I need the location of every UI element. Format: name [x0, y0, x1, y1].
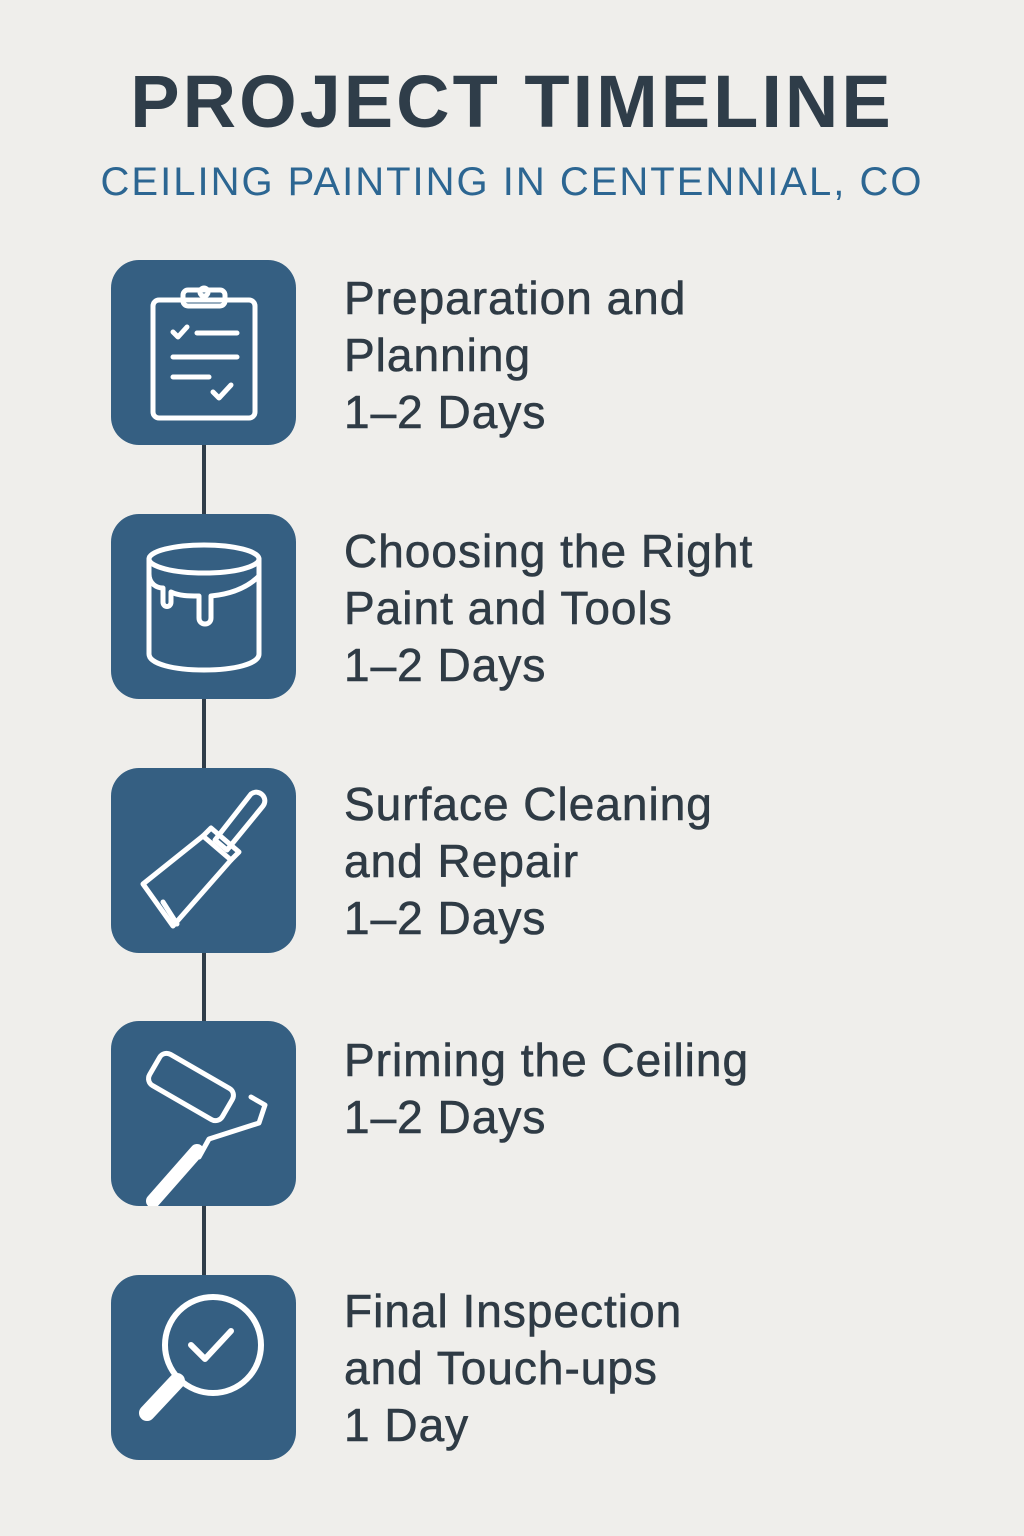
- title: PROJECT TIMELINE: [130, 60, 894, 143]
- step 2 text: Paint and Tools: [344, 582, 673, 634]
- step 1 text: Planning: [344, 329, 531, 381]
- step 3 text: 1–2 Days: [344, 892, 546, 944]
- step 2 text: [344, 525, 753, 691]
- step 3 text: and Repair: [344, 835, 579, 887]
- step 2 text: Choosing the Right: [344, 525, 753, 577]
- step 4 text: Priming the Ceiling: [344, 1034, 749, 1086]
- icon: paint can: [111, 514, 296, 699]
- subtitle: CEILING PAINTING IN CENTENNIAL, CO: [101, 160, 923, 204]
- step 5 text: Final Inspection: [344, 1285, 682, 1337]
- step 2 text: 1–2 Days: [344, 639, 546, 691]
- connector line: [202, 440, 206, 1290]
- step 1 text: 1–2 Days: [344, 386, 546, 438]
- step 4 text: 1–2 Days: [344, 1091, 546, 1143]
- step 1 text: [344, 272, 686, 438]
- step 4 text: [344, 1034, 749, 1143]
- icon: magnifier check: [111, 1275, 296, 1460]
- step 5 text: 1 Day: [344, 1399, 469, 1451]
- icon: paint brush: [111, 768, 296, 953]
- icon: paint roller: [111, 1021, 296, 1206]
- step 1 text: Preparation and: [344, 272, 686, 324]
- step 3 text: Surface Cleaning: [344, 778, 713, 830]
- step 3 text: [344, 778, 713, 944]
- icon: clipboard: [111, 260, 296, 445]
- step 5 text: [344, 1285, 682, 1451]
- step 5 text: and Touch-ups: [344, 1342, 658, 1394]
